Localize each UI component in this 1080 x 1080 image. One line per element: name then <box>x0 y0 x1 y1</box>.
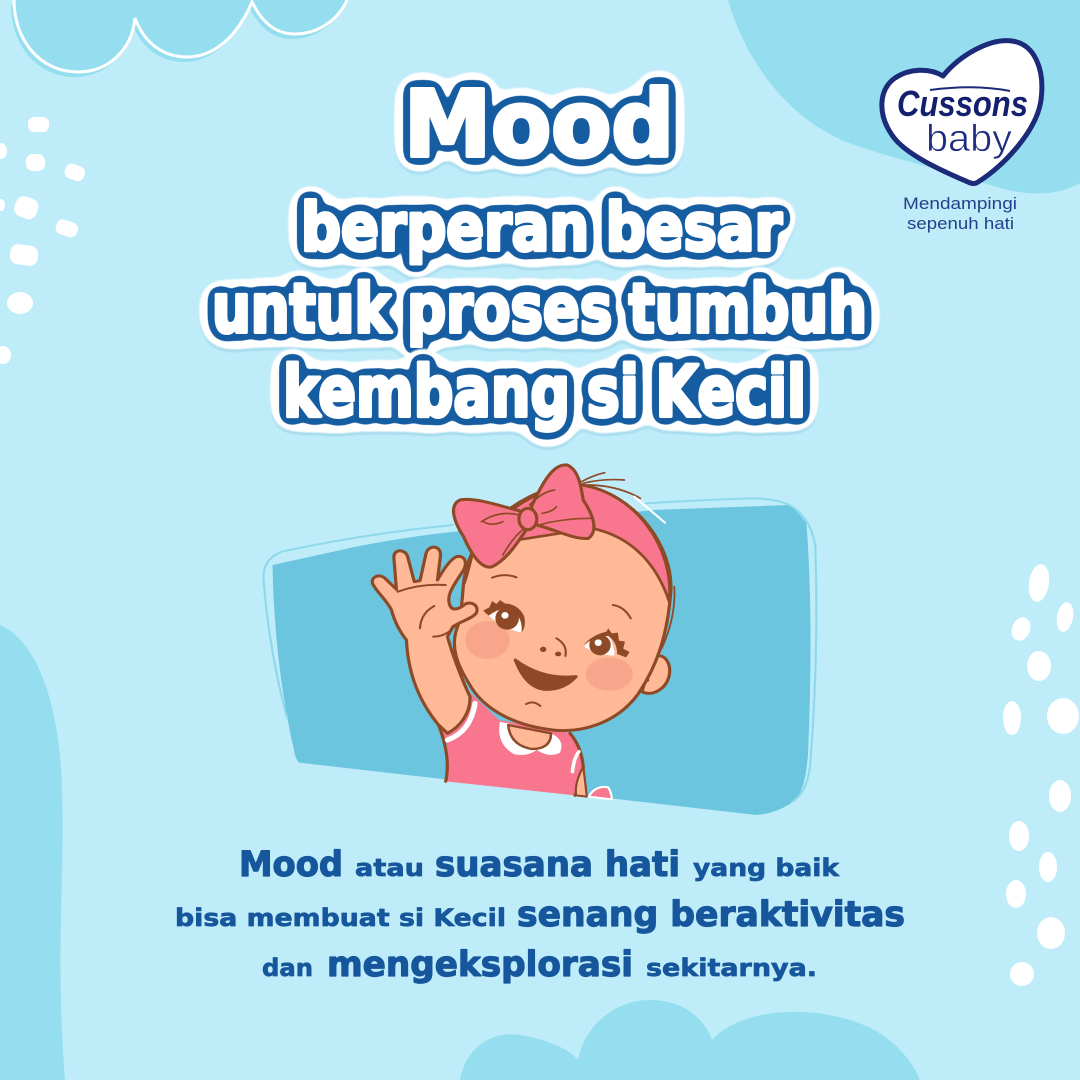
body line 3: sekitarnya. <box>646 954 817 982</box>
title: Mood <box>404 71 674 178</box>
face details <box>465 575 633 706</box>
title: untuk proses tumbuh <box>212 270 867 349</box>
title <box>212 71 867 433</box>
bow <box>454 465 594 567</box>
eyebrows <box>492 575 631 618</box>
nose <box>540 647 546 652</box>
dress <box>439 693 583 795</box>
right eye <box>584 628 630 657</box>
body line 2: senang beraktivitas <box>517 895 905 935</box>
sleeve trim <box>447 703 475 740</box>
cheeks <box>465 621 510 659</box>
cloud: bottom <box>460 1000 920 1080</box>
logo brand name: Cussons <box>897 83 1028 124</box>
collar <box>499 722 561 755</box>
title: berperan besar <box>301 189 782 266</box>
body line 1: Mood <box>239 845 343 885</box>
logo brand name: baby <box>926 118 1012 160</box>
logo tagline: Mendampingi <box>903 195 1017 213</box>
cloud: top left <box>11 0 347 77</box>
logo tagline: sepenuh hati <box>907 215 1014 233</box>
title: kembang si Kecil <box>283 351 806 433</box>
ear <box>642 656 670 693</box>
panel sketch outline <box>263 498 816 802</box>
small hand at panel edge <box>589 787 612 799</box>
logo heart <box>882 41 1042 184</box>
illustration: waving baby on blue panel <box>263 465 816 815</box>
white hair highlight <box>634 497 665 523</box>
chin <box>526 702 540 706</box>
hair strands <box>581 473 674 648</box>
body line 3: dan <box>262 954 313 982</box>
left eye <box>483 600 525 633</box>
mouth <box>515 660 576 689</box>
blob: top right <box>728 0 1080 193</box>
body line 2: bisa membuat si Kecil <box>175 904 506 932</box>
body line 1: atau <box>355 854 424 882</box>
blob: bottom left <box>0 625 65 1080</box>
baby figure <box>372 465 674 799</box>
dots: left pattern <box>0 117 87 364</box>
body line 3: mengeksplorasi <box>327 945 633 985</box>
logo brand name <box>897 83 1028 160</box>
panel <box>272 505 811 815</box>
body line 1: yang baik <box>693 854 840 882</box>
head <box>454 485 671 731</box>
body line 1: suasana hati <box>435 845 680 885</box>
logo: Cussons baby <box>882 41 1042 233</box>
headband <box>464 485 670 602</box>
arm and hand <box>372 547 477 733</box>
dots: right pattern <box>1003 563 1079 986</box>
body text <box>175 845 905 985</box>
